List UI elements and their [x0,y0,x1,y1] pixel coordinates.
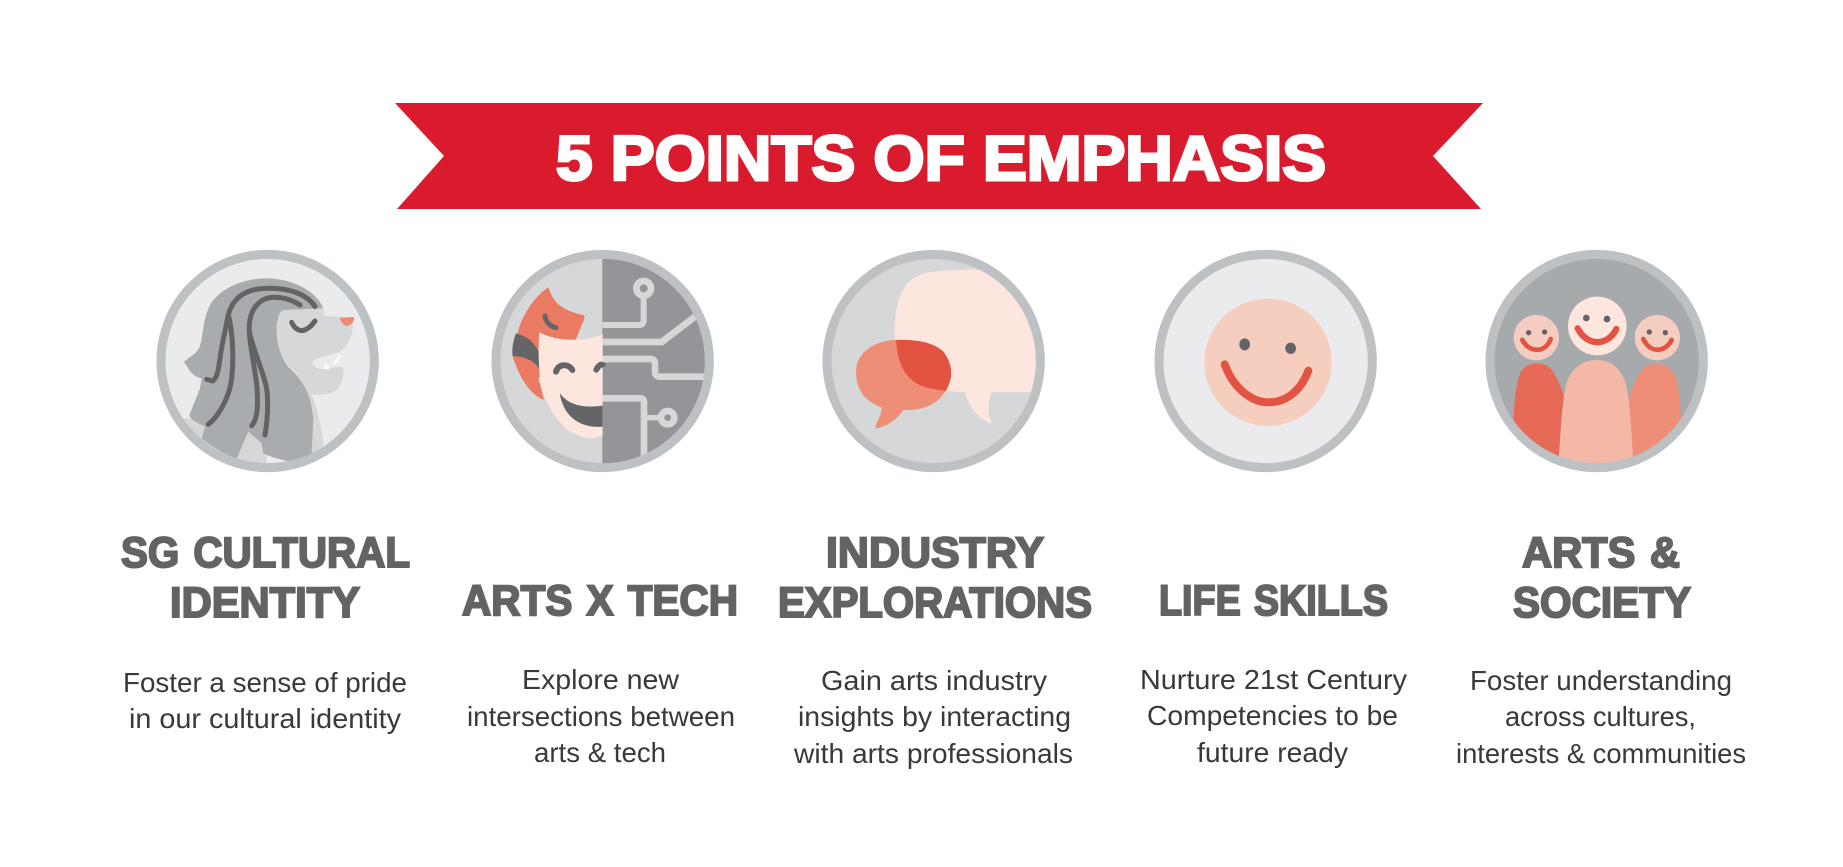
heading: ARTS X TECH [462,577,738,625]
heading: ARTS & [1522,529,1680,577]
description: insights by interacting [798,701,1071,732]
description: arts & tech [534,737,666,768]
heading [778,529,1092,627]
description [467,664,735,768]
description: interests & communities [1456,738,1746,769]
panel: Arts x Tech [462,252,738,768]
description [1456,665,1746,769]
heading: SOCIETY [1513,579,1691,627]
description: across cultures, [1505,701,1696,732]
heading [1513,529,1691,627]
description: future ready [1197,737,1348,768]
heading: LIFE SKILLS [1159,577,1388,625]
description [793,665,1073,769]
panel: Life Skills [1140,254,1407,768]
title: 5 POINTS OF EMPHASIS [556,124,1326,194]
heading: INDUSTRY [826,529,1044,577]
description: Nurture 21st Century [1140,664,1407,695]
panel: Arts & Society [1456,254,1746,769]
description: Competencies to be [1147,700,1398,731]
icon: speech bubbles [827,254,1043,468]
description: Foster understanding [1470,665,1732,696]
icon: smiley [1159,254,1372,468]
banner: title ribbon [395,103,1483,209]
description: in our cultural identity [129,703,401,734]
description: Gain arts industry [821,665,1047,696]
heading: IDENTITY [170,579,360,627]
heading [121,529,410,627]
description [1140,664,1407,768]
description: with arts professionals [793,738,1073,769]
description: Foster a sense of pride [123,667,407,698]
ribbon shape [395,103,1483,209]
description [123,667,407,734]
heading: SG CULTURAL [121,529,410,577]
icon: mask and circuit [496,252,716,472]
description: Explore new [522,664,679,695]
heading: EXPLORATIONS [778,579,1092,627]
icon: merlion [161,254,374,472]
icon: three people [1490,254,1703,475]
panel: Industry Explorations [778,254,1092,769]
panel: SG cultural identity [121,254,410,734]
description: intersections between [467,701,735,732]
